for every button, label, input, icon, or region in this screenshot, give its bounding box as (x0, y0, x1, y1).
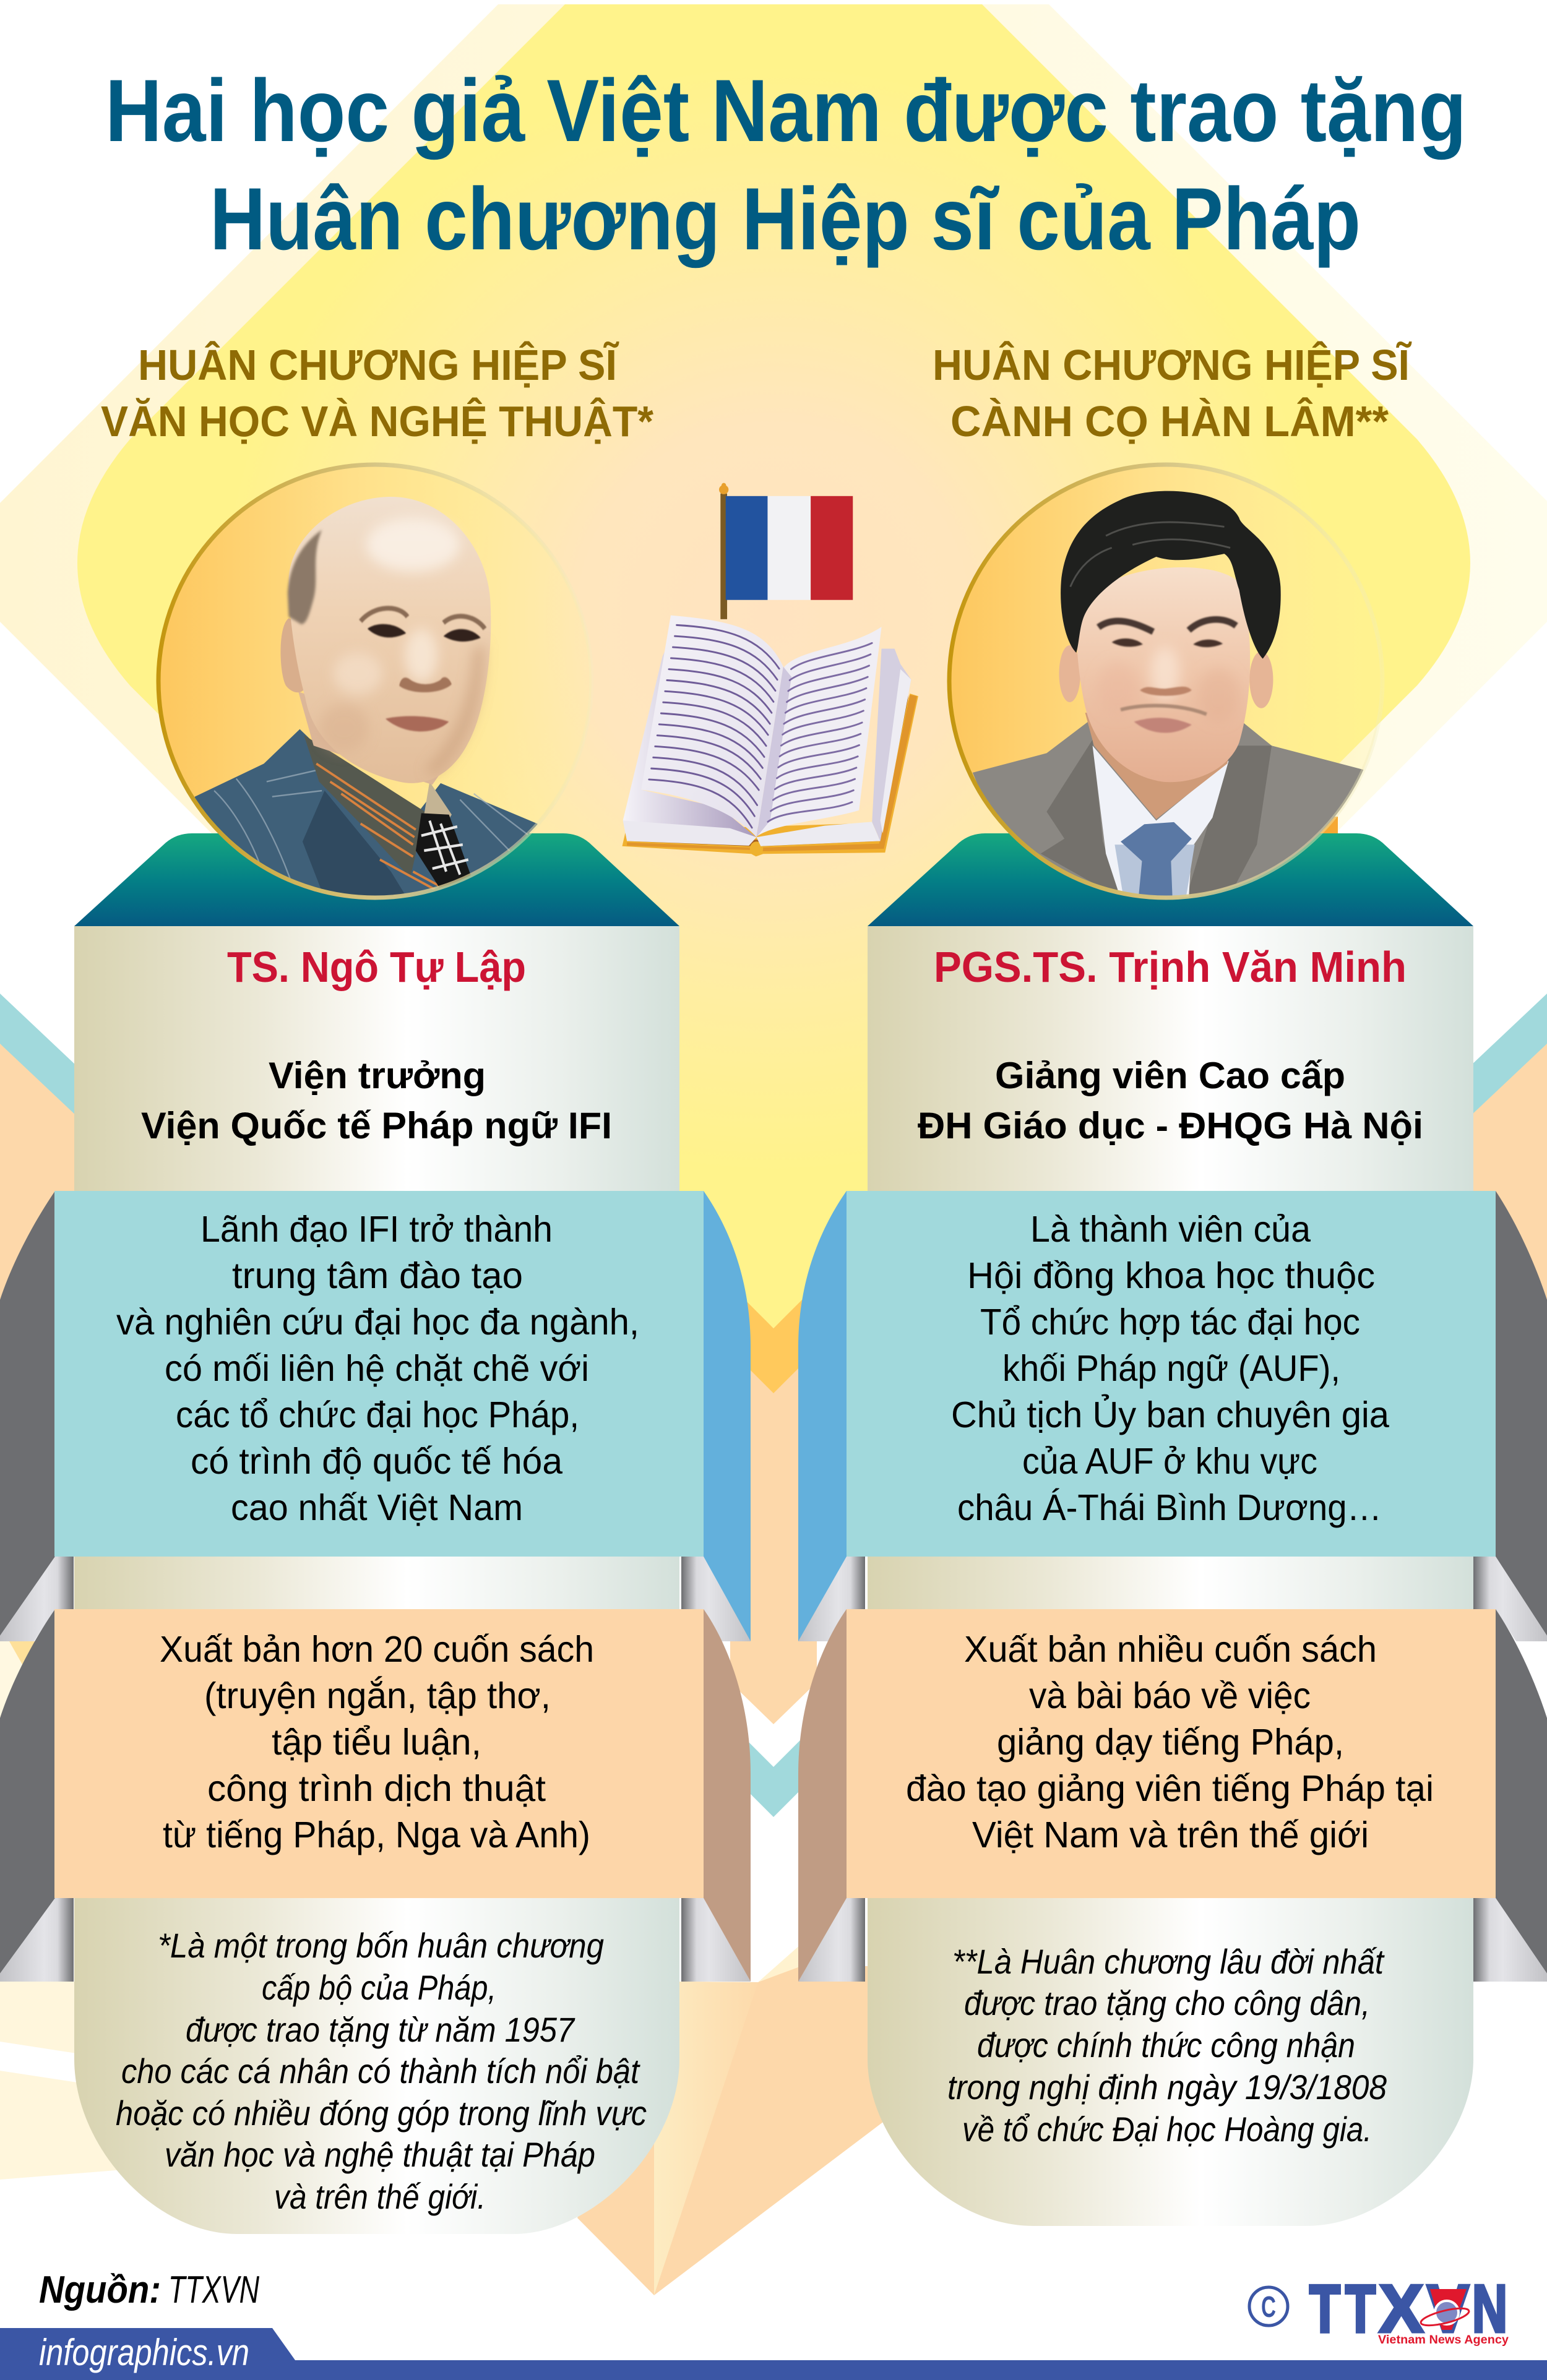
left outer wing lower (0, 1609, 55, 1974)
panel: right scholar (798, 833, 1547, 2226)
right note text (947, 1942, 1387, 2149)
logo: TTXVN wordmark (1309, 2271, 1509, 2347)
source (39, 2269, 259, 2311)
left note text: hoặc có nhiều đóng góp trong lĩnh vực (116, 2094, 647, 2133)
left teal box: và nghiên cứu đại học đa ngành, (116, 1302, 639, 1343)
left portrait ring (158, 465, 592, 898)
pale lower left band (0, 1982, 155, 2180)
left note text: văn học và nghệ thuật tại Pháp (165, 2135, 595, 2174)
left note text: cho các cá nhân có thành tích nổi bật (121, 2051, 640, 2090)
left cap (74, 833, 679, 926)
globe (1435, 2301, 1459, 2324)
left gold body (74, 926, 679, 1192)
footer bar (0, 2328, 1547, 2380)
left award heading (101, 340, 654, 445)
suit pinstripes (214, 770, 528, 879)
left silver lower (0, 1898, 74, 1982)
small pale wedge lower left (0, 1641, 43, 1726)
left blue wing (704, 1191, 751, 1641)
right page block (872, 649, 911, 841)
right award heading: CÀNH CỌ HÀN LÂM** (950, 397, 1389, 445)
flag pole (719, 483, 728, 619)
left page lines (649, 625, 779, 828)
lapel shadow (303, 791, 408, 899)
footer bar: infographics.vn (39, 2332, 249, 2373)
right leaf edge (881, 669, 911, 833)
blue letters: T (1309, 2271, 1340, 2347)
right note capsule (868, 1898, 1473, 2226)
pale sliver centre (758, 1944, 801, 1982)
left teal and peach wedge (0, 994, 77, 1312)
source: TTXVN (168, 2269, 259, 2311)
title (105, 62, 1467, 269)
logo: copyright mark (1249, 2287, 1288, 2326)
right peach box: Xuất bản nhiều cuốn sách (964, 1629, 1377, 1670)
right page lines (768, 643, 872, 822)
blue letters: X (1379, 2271, 1423, 2347)
facial features (1098, 619, 1236, 733)
right teal box (847, 1191, 1496, 1557)
red V (1430, 2289, 1467, 2330)
face (1077, 567, 1250, 782)
right teal box: châu Á-Thái Bình Dương… (957, 1487, 1382, 1528)
shirt (1093, 745, 1229, 899)
right note text: về tổ chức Đại học Hoàng gia. (962, 2110, 1372, 2149)
blue letters: T (1345, 2271, 1376, 2347)
right silver upper (1473, 1557, 1547, 1641)
icon: French flag and open book (622, 483, 918, 856)
blue letters: N (1472, 2271, 1507, 2347)
portrait: PGS.TS. Trịnh Văn Minh (973, 491, 1363, 926)
centre peach column (730, 1330, 817, 1724)
right outer wing upper (1496, 1191, 1547, 1636)
left name: TS. Ngô Tự Lập (227, 943, 526, 991)
right peach box: Việt Nam và trên thế giới (972, 1815, 1369, 1855)
left teal box: trung tâm đào tạo (232, 1255, 523, 1296)
left note text: cấp bộ của Pháp, (262, 1968, 496, 2007)
neck (298, 692, 439, 784)
spine shade (756, 667, 791, 837)
jacket (973, 722, 1363, 926)
panel: left scholar (0, 833, 751, 2234)
neck (1085, 713, 1236, 819)
necktie (1121, 822, 1192, 899)
right note text: **Là Huân chương lâu đời nhất (952, 1942, 1385, 1981)
left award heading: VĂN HỌC VÀ NGHỆ THUẬT* (101, 397, 654, 445)
lapels (1041, 740, 1272, 899)
left portrait disc (158, 465, 592, 898)
right inner silver upper (798, 1557, 865, 1641)
lighter fold of star (654, 1982, 758, 2295)
right block base (756, 822, 881, 846)
right teal box: của AUF ở khu vực (1022, 1441, 1317, 1482)
inner yellow hexagon (77, 4, 1470, 1328)
bottom peach star (577, 1966, 883, 2295)
right gold body (868, 926, 1473, 1192)
hair (1061, 491, 1281, 659)
tie (416, 813, 471, 890)
shaved hair (288, 530, 322, 624)
orange chevron (730, 1284, 817, 1393)
facial features (361, 608, 485, 731)
left teal box: cao nhất Việt Nam (231, 1487, 523, 1528)
right portrait ring (949, 465, 1382, 898)
orange sliver behind right portrait (1318, 817, 1338, 835)
left peach box: tập tiểu luận, (272, 1722, 481, 1763)
left peach box: từ tiếng Pháp, Nga và Anh) (163, 1815, 590, 1855)
right note text: được chính thức công nhận (977, 2026, 1355, 2064)
left strip (74, 1557, 679, 1610)
left page (641, 616, 783, 837)
left teal box: có trình độ quốc tế hóa (191, 1441, 562, 1482)
teal chevron (736, 1730, 811, 1817)
orbit (1420, 2305, 1470, 2329)
head (289, 497, 491, 783)
source: Nguồn: (39, 2269, 161, 2311)
title: Huân chương Hiệp sĩ của Pháp (210, 170, 1361, 269)
right teal box: Tổ chức hợp tác đại học (980, 1302, 1360, 1343)
right note text: trong nghị định ngày 19/3/1808 (947, 2068, 1387, 2107)
left note text: *Là một trong bốn huân chương (158, 1926, 604, 1965)
right peach box (847, 1609, 1496, 1898)
right award heading (933, 340, 1412, 445)
left taupe wing (704, 1609, 751, 1982)
left teal box: Lãnh đạo IFI trở thành (200, 1209, 553, 1250)
left note text: được trao tặng từ năm 1957 (186, 2010, 575, 2049)
striped shirt collar (304, 735, 429, 878)
right outer wing lower (1496, 1609, 1547, 1974)
face shading (1097, 647, 1239, 722)
right peach box: và bài báo về việc (1029, 1675, 1311, 1716)
right award heading: HUÂN CHƯƠNG HIỆP SĨ (933, 340, 1412, 389)
right taupe wing (798, 1609, 847, 1982)
right role (918, 1055, 1423, 1146)
right peach box: đào tạo giảng viên tiếng Pháp tại (906, 1768, 1434, 1809)
left teal box: có mối liên hệ chặt chẽ với (165, 1348, 589, 1389)
left role (141, 1055, 612, 1146)
left note capsule (74, 1898, 679, 2234)
left role: Viện trưởng (269, 1055, 486, 1096)
left teal box: các tổ chức đại học Pháp, (176, 1394, 579, 1435)
outer pale hexagon (0, 4, 1547, 1395)
left teal box (54, 1191, 704, 1557)
book cover (622, 694, 918, 856)
left page block (623, 643, 756, 837)
left peach box: (truyện ngắn, tập thơ, (204, 1675, 551, 1716)
right peach box: giảng dạy tiếng Pháp, (997, 1722, 1344, 1763)
left inner silver upper (681, 1557, 751, 1641)
blue letters (1309, 2271, 1507, 2347)
right silver lower (1473, 1898, 1547, 1982)
portrait: TS. Ngô Tự Lập (194, 497, 537, 896)
right teal box: Hội đồng khoa học thuộc (967, 1255, 1375, 1296)
right portrait disc (949, 465, 1382, 898)
left peach box: công trình dịch thuật (207, 1768, 546, 1809)
right role: Giảng viên Cao cấp (995, 1055, 1345, 1096)
right blue wing (798, 1191, 847, 1641)
ears (1059, 645, 1273, 708)
logo: copyright mark: C (1261, 2291, 1276, 2324)
left peach box (54, 1609, 704, 1898)
face shading (319, 518, 485, 776)
ear (280, 618, 305, 692)
right teal and peach wedge (1470, 994, 1547, 1312)
left silver upper (0, 1557, 74, 1641)
right role: ĐH Giáo dục - ĐHQG Hà Nội (918, 1105, 1423, 1146)
agency name: Vietnam News Agency (1378, 2334, 1509, 2347)
suit jacket (194, 729, 537, 893)
blue letters: V (1427, 2271, 1469, 2347)
right inner silver lower (798, 1898, 865, 1982)
right note text: được trao tặng cho công dân, (964, 1983, 1370, 2022)
left peach box: Xuất bản hơn 20 cuốn sách (160, 1629, 594, 1670)
left outer wing upper (0, 1191, 55, 1636)
right name: PGS.TS. Trịnh Văn Minh (934, 943, 1407, 991)
left award heading: HUÂN CHƯƠNG HIỆP SĨ (138, 340, 619, 389)
left note text: và trên thế giới. (274, 2177, 486, 2216)
left role: Viện Quốc tế Pháp ngữ IFI (141, 1105, 612, 1146)
left inner silver lower (681, 1898, 751, 1982)
right teal box: khối Pháp ngữ (AUF), (1002, 1348, 1340, 1389)
right cap (868, 833, 1473, 926)
right teal box: Là thành viên của (1030, 1209, 1311, 1250)
left note text (116, 1926, 647, 2216)
right strip (868, 1557, 1473, 1610)
shirt stripes (316, 763, 441, 890)
right teal box: Chủ tịch Ủy ban chuyên gia (951, 1394, 1389, 1435)
hair highlights (1071, 522, 1230, 586)
flag of France (726, 496, 853, 600)
left block base (623, 820, 756, 846)
right page (757, 627, 882, 836)
